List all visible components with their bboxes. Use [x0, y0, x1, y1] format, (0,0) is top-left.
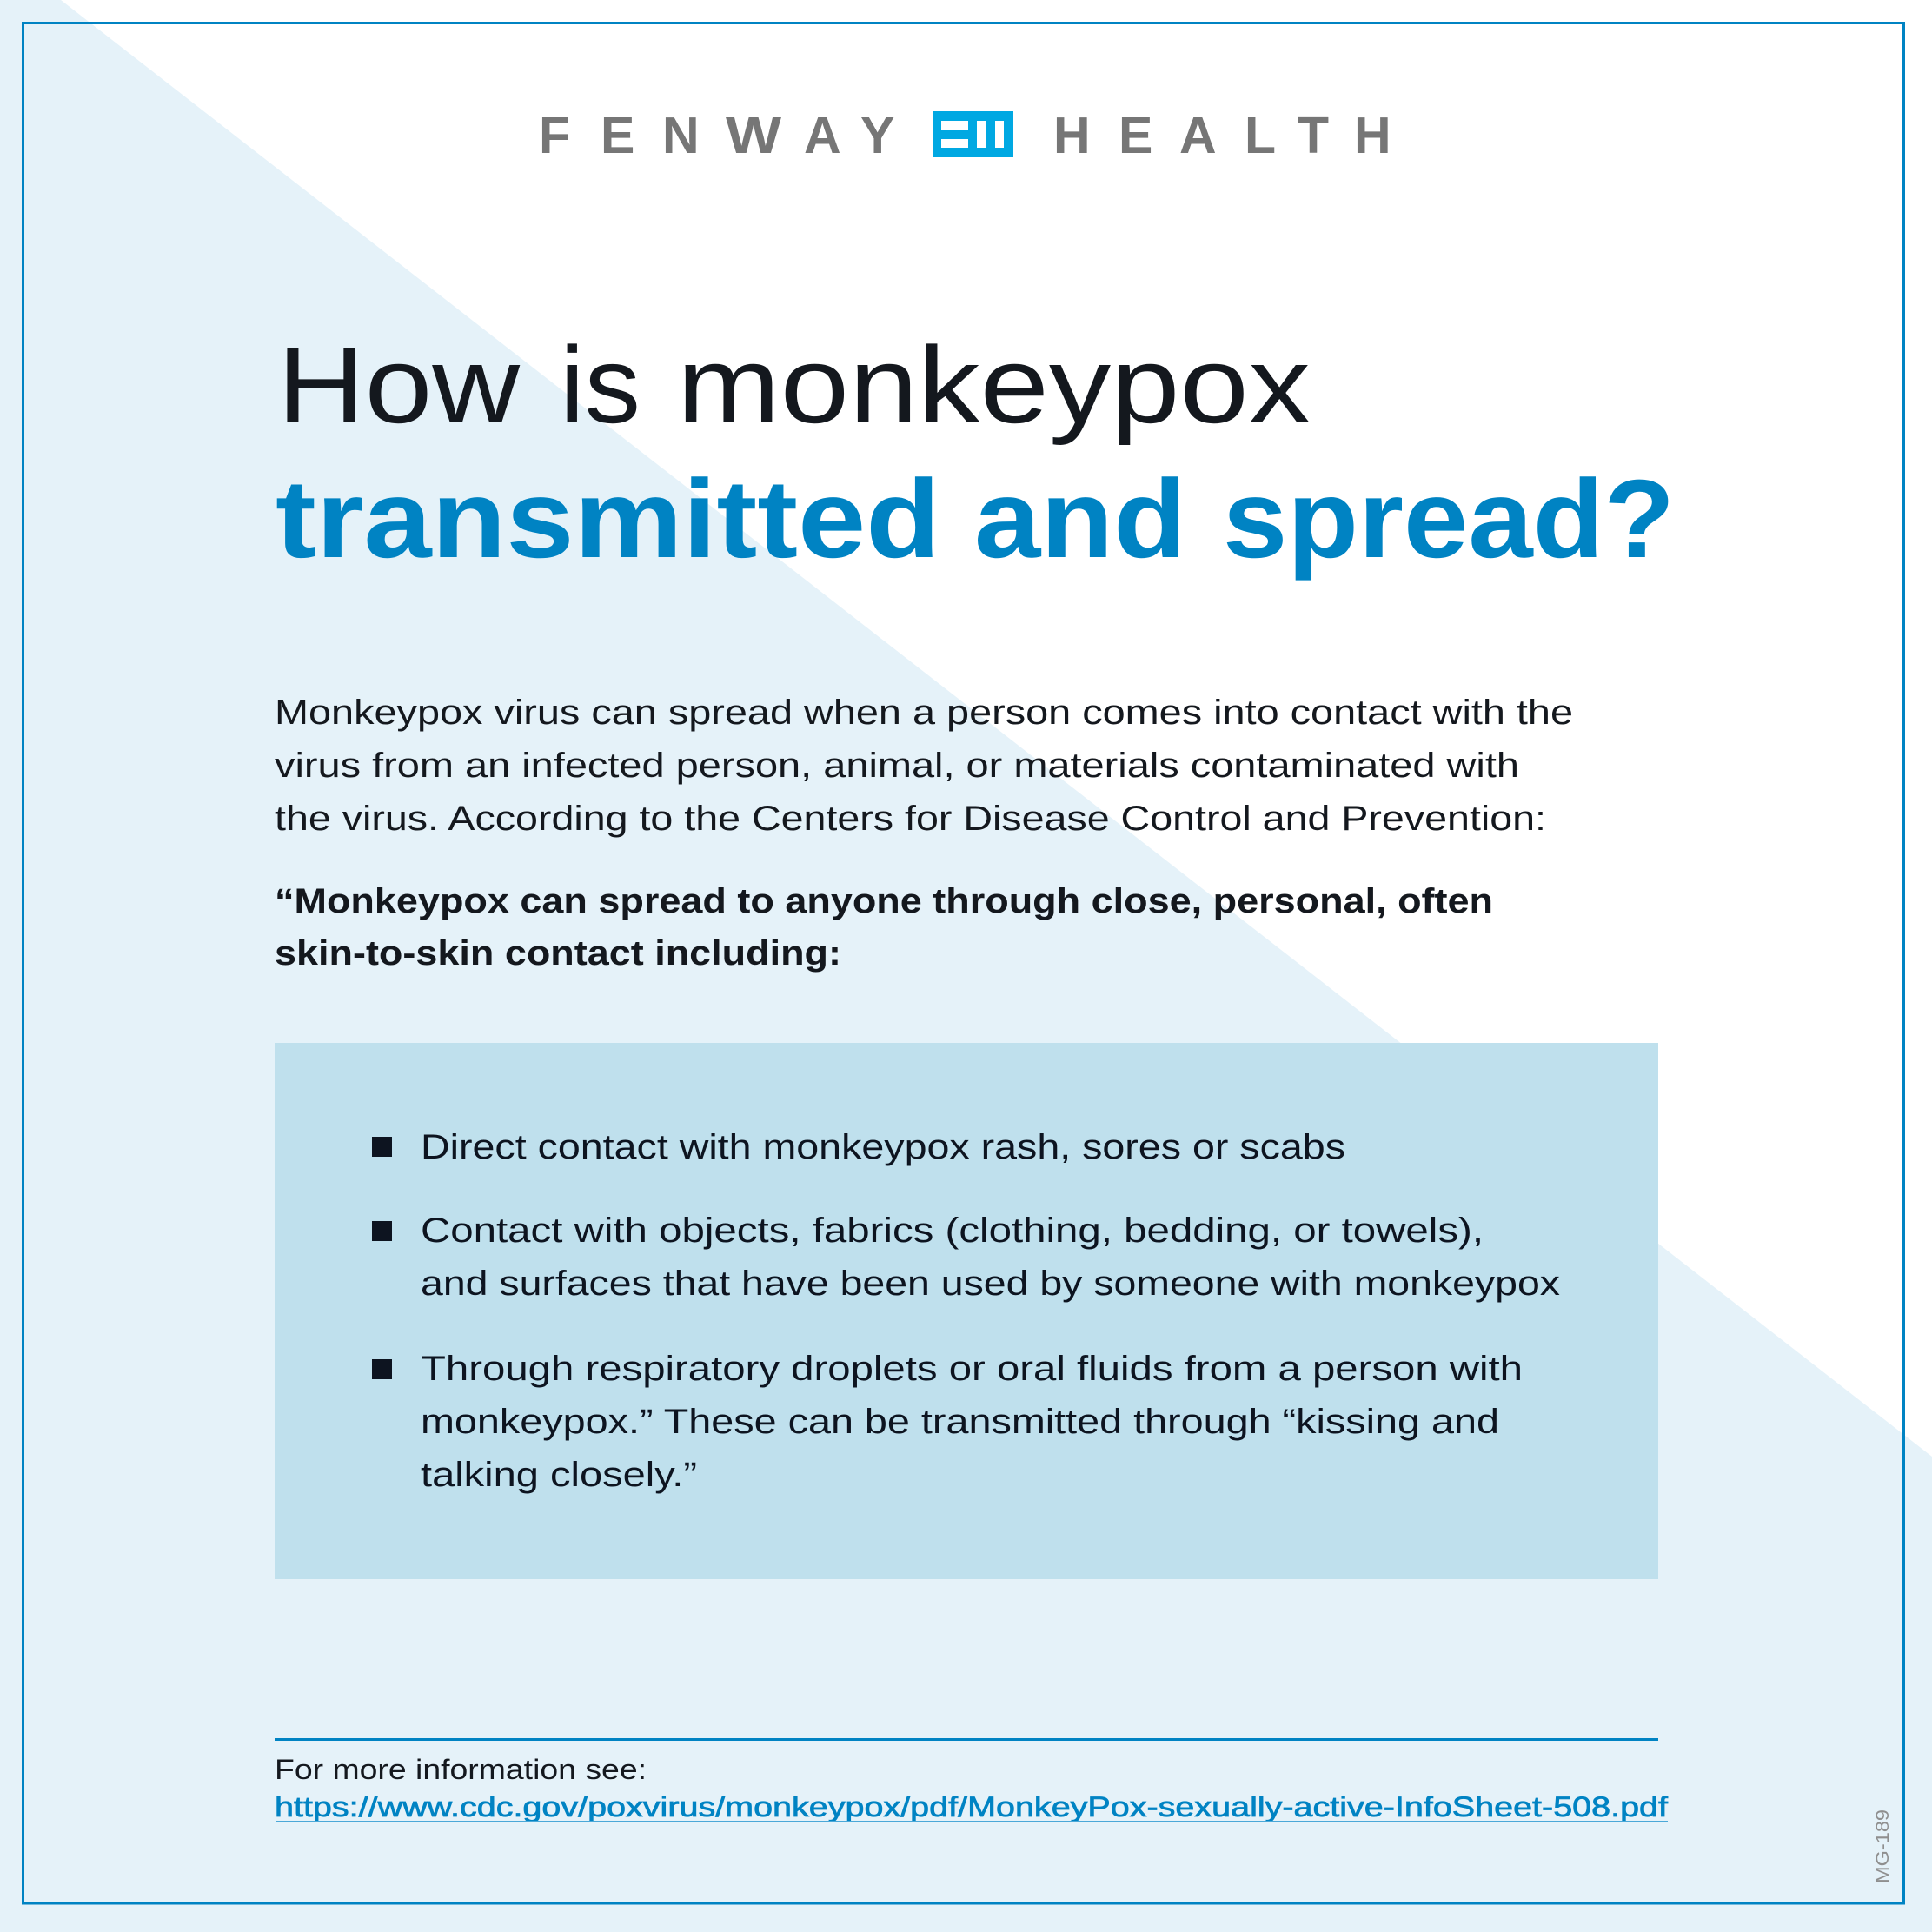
bullet 3: talking closely.”	[421, 1456, 697, 1494]
logo wordmark left: AY	[804, 107, 894, 164]
title	[276, 325, 1675, 581]
bold quote lead-in	[275, 882, 1493, 973]
footer rule	[275, 1738, 1658, 1741]
document code: MG-189	[1873, 1809, 1893, 1883]
logo wordmark left: FEN	[539, 107, 700, 164]
title line 1: How	[277, 325, 521, 446]
intro paragraph	[275, 694, 1573, 838]
bold quote lead-in: skin-to-skin contact including:	[275, 934, 841, 973]
bullet 3	[372, 1350, 1523, 1494]
bullet 2	[372, 1212, 1560, 1303]
bold quote lead-in: “Monkeypox can spread to anyone through close, personal, often	[275, 882, 1493, 920]
bullet 1: Direct contact with monkeypox rash, sores or scabs	[421, 1128, 1345, 1166]
bullet 3: monkeypox.” These can be transmitted through “kissing and	[421, 1403, 1499, 1441]
logo wordmark right: HEALTH	[1053, 107, 1391, 164]
bullet 2: and surfaces that have been used by someone with monkeypox	[421, 1265, 1560, 1303]
title line 1: monkeypox	[677, 325, 1311, 446]
footer text	[275, 1754, 1668, 1822]
panel: contact list	[275, 1043, 1658, 1579]
logo icon	[933, 111, 1013, 157]
title line 2: transmitted	[276, 457, 940, 581]
title line 1: is	[560, 325, 641, 446]
intro paragraph: the virus. According to the Centers for Disease Control and Prevention:	[275, 800, 1546, 838]
title line 2: spread?	[1223, 457, 1675, 581]
intro paragraph: virus from an infected person, animal, or materials contaminated with	[275, 747, 1519, 785]
source link: https://www.cdc.gov/poxvirus/monkeypox/pdf/MonkeyPox-sexually-active-InfoSheet-508.pdf	[275, 1791, 1668, 1822]
logo wordmark left: W	[726, 107, 781, 164]
title line 2: and	[974, 457, 1186, 581]
bullet 2: Contact with objects, fabrics (clothing, bedding, or towels),	[421, 1212, 1484, 1250]
bullet 3: Through respiratory droplets or oral fluids from a person with	[421, 1350, 1523, 1388]
footer text: For more information see:	[275, 1754, 647, 1785]
logo: Fenway Health	[539, 107, 1391, 164]
intro paragraph: Monkeypox virus can spread when a person comes into contact with the	[275, 694, 1573, 732]
